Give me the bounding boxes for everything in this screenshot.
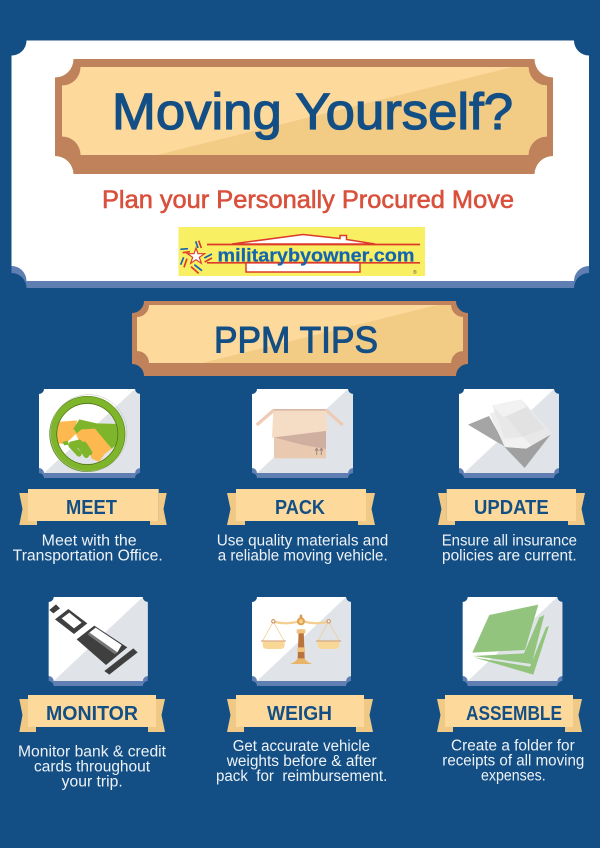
ribbon xyxy=(227,489,375,525)
ribbon xyxy=(19,489,167,525)
description xyxy=(442,738,584,785)
ribbon xyxy=(438,489,585,525)
panel: header xyxy=(12,40,589,288)
card with box icon xyxy=(252,389,353,478)
card with papers icon xyxy=(459,389,559,478)
tip: update xyxy=(438,389,585,565)
description: Use quality materials and xyxy=(217,533,388,550)
icon: handshake xyxy=(50,395,127,472)
ribbon xyxy=(437,695,582,732)
icon: balance scales xyxy=(261,615,341,664)
description xyxy=(18,744,167,791)
description: cards throughout xyxy=(34,759,151,776)
title plaque xyxy=(55,59,553,174)
description: Monitor bank & credit xyxy=(18,744,167,761)
card with handshake icon xyxy=(39,389,140,478)
description: expenses. xyxy=(481,768,546,785)
tip: meet xyxy=(13,389,167,565)
subtitle: Plan your Personally Procured Move xyxy=(102,186,514,214)
description: pack for reimbursement. xyxy=(216,768,387,785)
description xyxy=(442,533,577,565)
description: Meet with the xyxy=(42,533,137,550)
description xyxy=(217,533,388,565)
card with credit card icon xyxy=(49,597,148,686)
icon: green folder xyxy=(472,605,549,675)
description xyxy=(216,738,387,785)
description: weights before & after xyxy=(226,753,377,770)
logo star mark xyxy=(180,241,212,273)
registered mark: ® xyxy=(413,269,417,276)
ribbon xyxy=(227,695,373,732)
label: WEIGH xyxy=(267,703,332,725)
description: Ensure all insurance xyxy=(442,533,577,550)
ribbon xyxy=(19,695,165,732)
card with scales icon xyxy=(252,597,351,686)
description: a reliable moving vehicle. xyxy=(218,548,388,565)
tip: monitor xyxy=(18,597,167,791)
label: UPDATE xyxy=(474,497,549,519)
label: MEET xyxy=(66,497,117,519)
logo: militarybyowner.com xyxy=(178,227,425,276)
label: PACK xyxy=(275,497,326,519)
description: policies are current. xyxy=(442,548,577,565)
tip: pack xyxy=(217,389,388,565)
heading text: PPM TIPS xyxy=(214,320,378,361)
tip: assemble xyxy=(437,597,584,785)
label: ASSEMBLE xyxy=(466,703,562,725)
icon: papers xyxy=(468,399,552,468)
description: Get accurate vehicle xyxy=(233,738,370,755)
description: Transportation Office. xyxy=(13,548,163,565)
description: your trip. xyxy=(62,774,123,791)
description: receipts of all moving xyxy=(442,753,584,770)
description xyxy=(13,533,163,565)
heading plaque: PPM TIPS xyxy=(132,301,468,376)
logo wordmark: militarybyowner.com xyxy=(218,244,414,266)
description: Create a folder for xyxy=(451,738,575,755)
tip: weigh xyxy=(216,597,387,785)
title: Moving Yourself? xyxy=(112,83,513,140)
icon: bank cards xyxy=(49,604,138,675)
icon: moving box xyxy=(257,409,343,458)
label: MONITOR xyxy=(46,703,139,725)
card with folder icon xyxy=(463,597,562,686)
